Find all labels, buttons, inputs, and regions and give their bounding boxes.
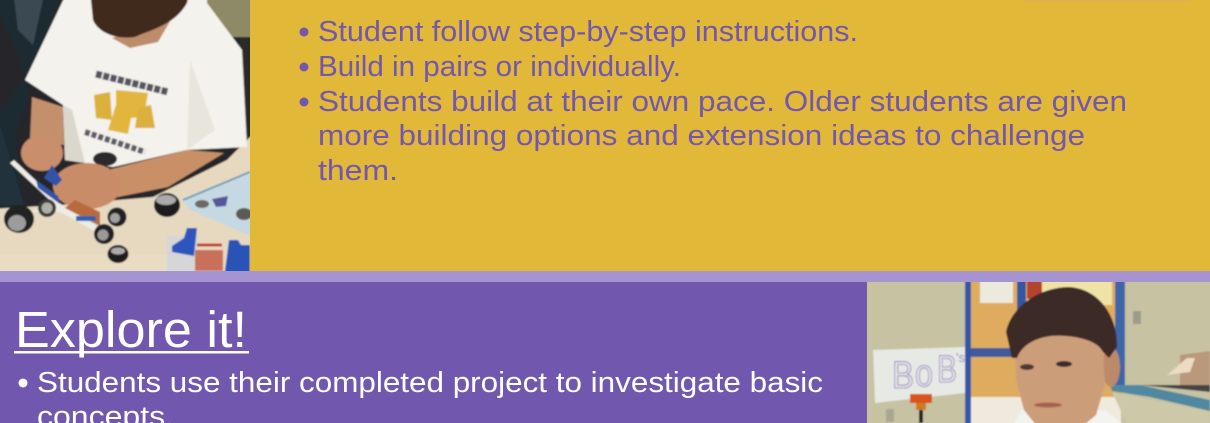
mouth <box>1034 402 1062 408</box>
model on table <box>910 394 932 403</box>
neck <box>112 18 172 48</box>
bullet list: build it: them. <box>318 155 398 187</box>
shirt print <box>85 74 168 166</box>
BOB'S sign: B <box>892 355 914 397</box>
instruction sheet <box>183 174 250 236</box>
BOB'S sign: 's <box>956 350 965 365</box>
hair <box>90 0 190 38</box>
right hand <box>53 163 121 209</box>
chair <box>0 0 62 215</box>
bullet list: explore it <box>18 367 823 423</box>
eyes <box>1020 364 1034 370</box>
left hand <box>21 135 63 171</box>
bullet list: build it <box>300 16 1127 187</box>
bullet list: explore it: Students use their completed project to investigate basic <box>37 367 823 399</box>
door frame <box>965 275 971 423</box>
bullet list: build it: Build in pairs or individually. <box>318 51 681 83</box>
BOB'S sign: o <box>915 353 933 395</box>
bullet list: build it: Students build at their own pace. Older students are given <box>318 86 1127 118</box>
heading: Explore it!: Explore it! <box>15 301 247 358</box>
brick tray <box>167 236 197 271</box>
bullet list: build it: more building options and extension ideas to challenge <box>318 120 1085 152</box>
cardboard box <box>1180 351 1210 385</box>
model car <box>10 160 100 234</box>
hair <box>1006 287 1117 358</box>
BOB'S sign <box>873 347 965 403</box>
boy shirt <box>1010 410 1130 423</box>
panel: build it (yellow) <box>0 0 1210 280</box>
face <box>1015 335 1106 423</box>
ear <box>1102 347 1120 387</box>
t-shirt <box>25 0 247 167</box>
arms <box>30 97 64 145</box>
BOB'S sign: B <box>937 349 957 391</box>
panel: explore it (purple) <box>0 275 1210 423</box>
teal sink counter <box>1112 392 1122 410</box>
table <box>0 136 250 271</box>
bullet list: build it: Student follow step-by-step instructions. <box>318 16 858 48</box>
divider band <box>0 271 1210 282</box>
wall switches <box>1133 311 1141 324</box>
photo: boy with his project <box>860 275 1210 423</box>
doorway <box>970 282 1122 398</box>
photo: boy building a model car <box>0 0 260 280</box>
